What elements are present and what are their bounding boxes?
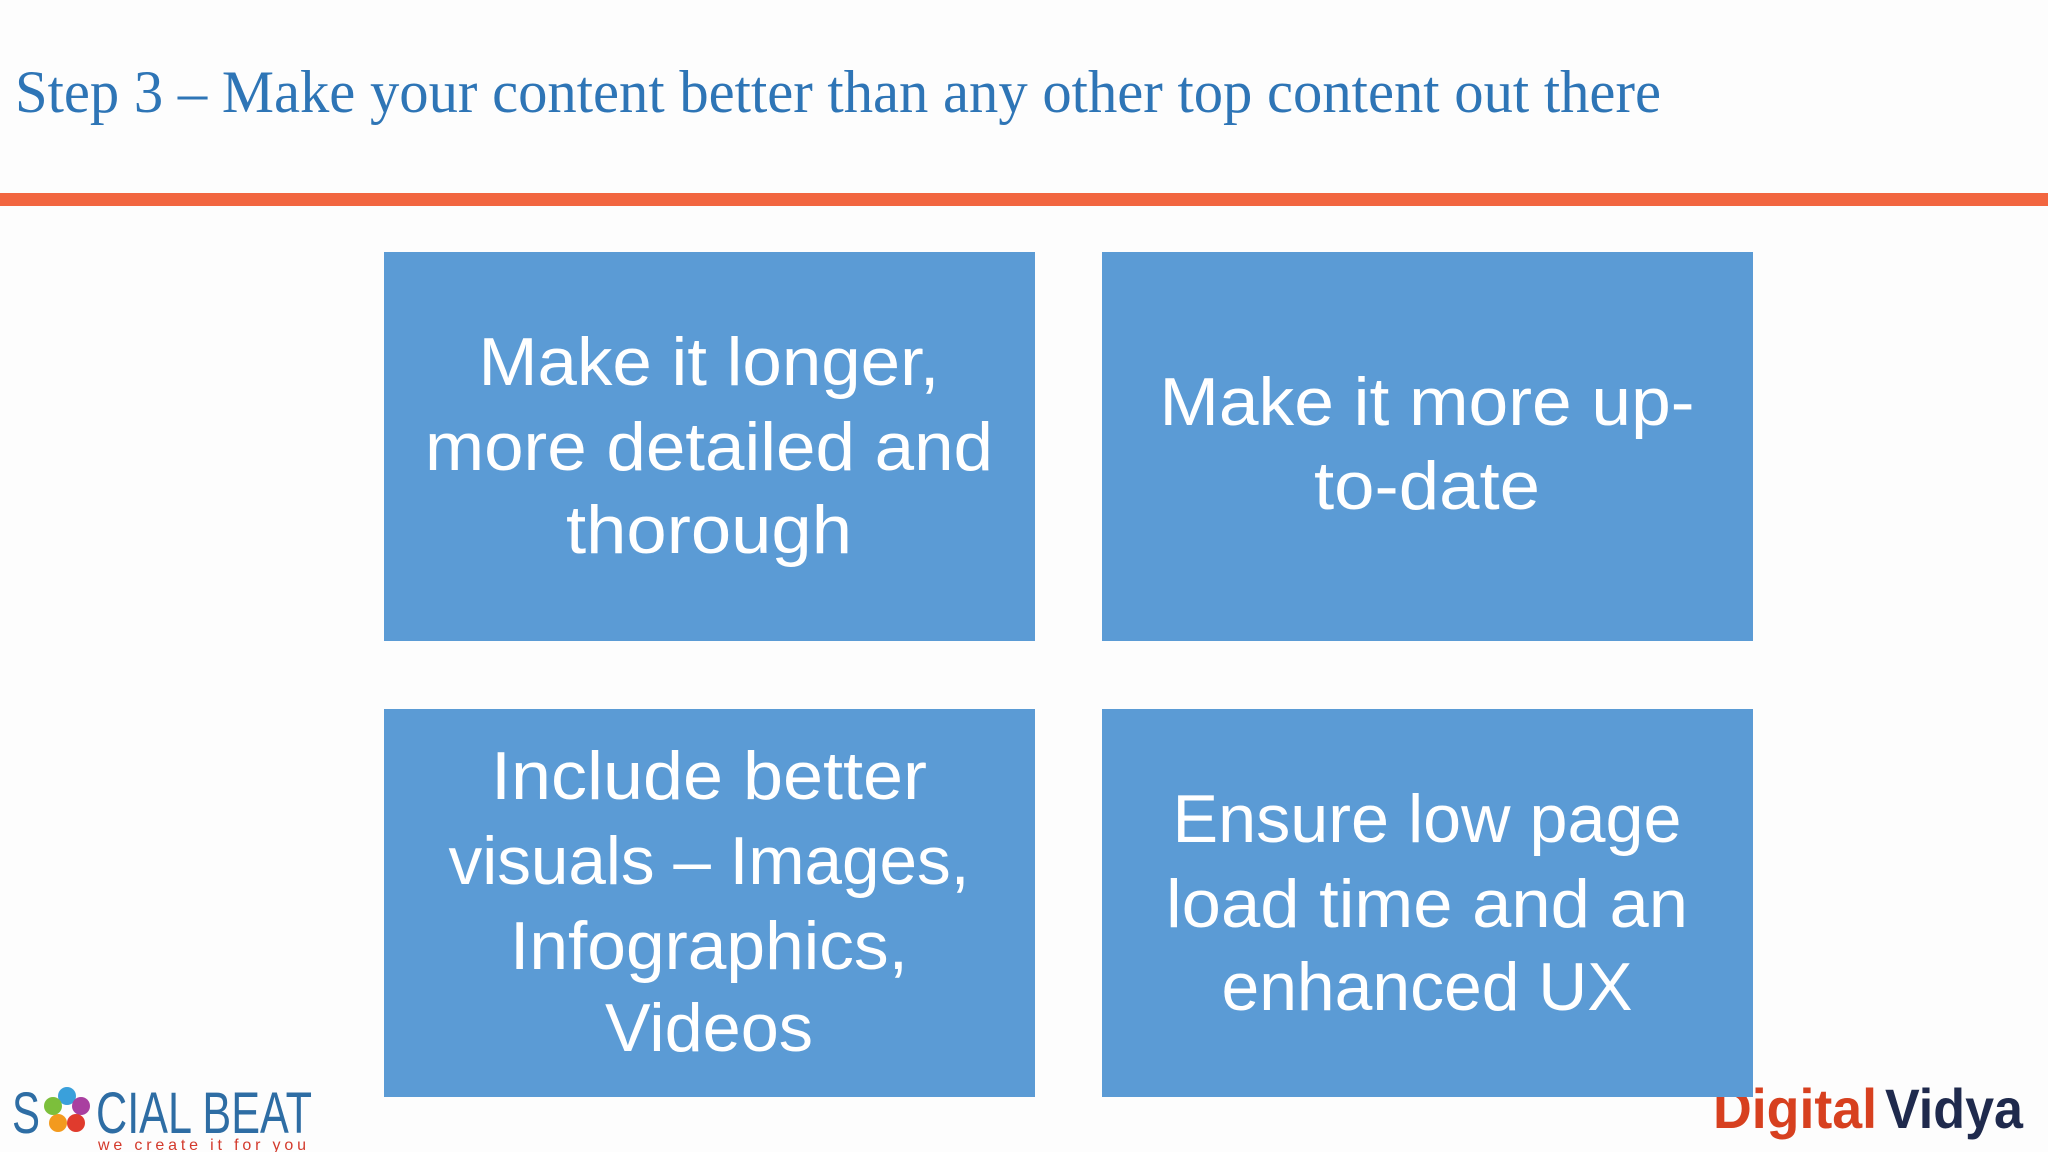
title: Step 3 – Make your content better than any other top content out there: [15, 59, 1661, 125]
panel: load time: [1102, 709, 1753, 1097]
panel: visuals: Videos: [605, 990, 813, 1066]
panel: longer: thorough: [566, 492, 852, 568]
panel: load time: enhanced UX: [1222, 949, 1632, 1025]
logo: Social Beat: [12, 1081, 312, 1152]
logo: Social Beat: S: [12, 1081, 40, 1146]
orange divider: [0, 193, 2048, 206]
panel: longer: more detailed and: [425, 409, 993, 485]
panel: visuals: visuals – Images,: [448, 823, 970, 899]
panel: visuals: [384, 709, 1035, 1097]
panel: load time: load time and an: [1166, 866, 1688, 942]
logo: Digital Vidya: Digital: [1713, 1077, 1877, 1140]
logo: Digital Vidya: [1713, 1077, 2024, 1140]
panel: up-to-date: to-date: [1314, 448, 1540, 524]
panel: load time: Ensure low page: [1172, 781, 1682, 857]
logo: Digital Vidya: Vidya: [1885, 1077, 2024, 1140]
panel: up-to-date: [1102, 252, 1753, 641]
panel: visuals: Include better: [491, 738, 927, 814]
panel: up-to-date: Make it more up-: [1160, 364, 1694, 440]
panel: longer: Make it longer,: [478, 324, 940, 400]
logo: Social Beat: CIAL BEAT: [96, 1081, 312, 1146]
panel: visuals: Infographics,: [510, 908, 908, 984]
panel: longer: [384, 252, 1035, 641]
